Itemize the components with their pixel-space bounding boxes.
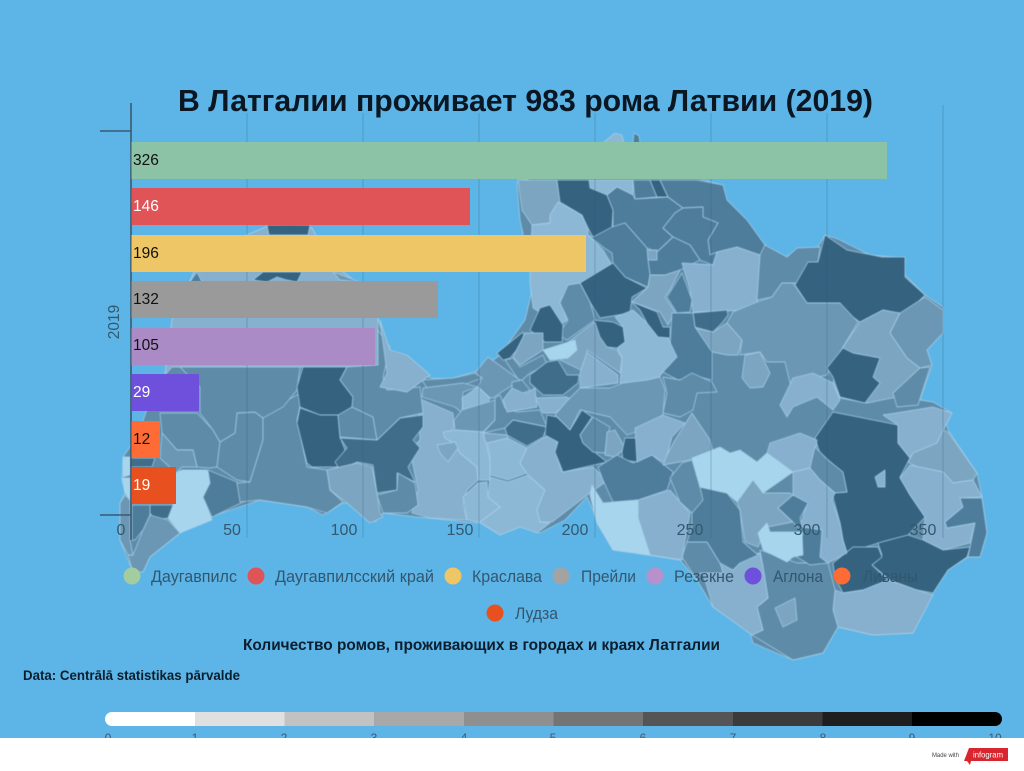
title: В Латгалии проживает 983 рома Латвии (2019)	[178, 83, 873, 118]
colour scale bar: 10	[988, 731, 1002, 745]
chart caption: Количество ромов, проживающих в городах и краях Латгалии	[243, 637, 720, 654]
colour scale bar: 0	[105, 731, 112, 745]
bar: Aglona 29: 29	[133, 384, 150, 401]
bar: Kraslava 196	[132, 235, 586, 272]
legend: Резекне	[674, 568, 734, 586]
legend: Прейли	[581, 568, 636, 586]
colour scale bar: 4	[461, 731, 468, 745]
colour scale bar: 1	[192, 731, 199, 745]
legend: Даугавпилс	[151, 568, 237, 586]
x axis labels: 200	[562, 522, 588, 539]
x axis labels: 50	[223, 522, 241, 539]
bar: Livani 12	[132, 421, 160, 458]
data source: Data: Centrālā statistikas pārvalde	[23, 668, 240, 683]
bar: Rezekne 105	[132, 328, 375, 365]
bar: Livani 12: 12	[133, 431, 150, 448]
legend: Аглона	[773, 568, 824, 586]
colour scale bar: 6	[640, 731, 647, 745]
made with infogram badge: infogram	[973, 750, 1003, 760]
bar: Aglona 29	[132, 374, 199, 411]
colour scale bar: 8	[820, 731, 827, 745]
legend: Лудза	[515, 605, 559, 623]
x axis labels: 300	[794, 522, 820, 539]
colour scale bar: 5	[550, 731, 557, 745]
bar: Kraslava 196: 196	[133, 245, 159, 262]
x axis labels: 250	[677, 522, 703, 539]
chart gridlines and vertical axis	[100, 103, 943, 540]
bar: Daugavpils 326	[132, 142, 887, 179]
bar chart: roma population 2019	[132, 142, 887, 504]
x axis labels	[117, 522, 936, 539]
made with infogram badge	[932, 748, 1008, 765]
x axis labels: 0	[117, 522, 126, 539]
x axis labels: 150	[447, 522, 473, 539]
bar: Daugavpils district 146: 146	[133, 198, 159, 215]
legend: Ливаны	[863, 568, 918, 586]
y axis label: 2019	[106, 305, 123, 339]
colour scale bar	[105, 712, 1002, 745]
made with infogram badge: Made with	[932, 752, 959, 759]
colour scale bar: 7	[730, 731, 737, 745]
x axis labels: 100	[331, 522, 357, 539]
legend: Краслава	[472, 568, 543, 586]
colour scale bar: 2	[281, 731, 288, 745]
map of Latvia by municipality	[120, 133, 987, 660]
legend: Даугавпилсский край	[275, 568, 434, 586]
colour scale bar: 3	[371, 731, 378, 745]
white footer strip	[0, 738, 1024, 771]
x axis labels: 350	[910, 522, 936, 539]
legend	[124, 568, 918, 623]
bar: Ludza 19	[132, 467, 176, 504]
bar: Preili 132: 132	[133, 291, 159, 308]
bar: Ludza 19: 19	[133, 477, 150, 494]
bar: Preili 132	[132, 281, 438, 318]
colour scale bar: 9	[909, 731, 916, 745]
bar: Rezekne 105: 105	[133, 337, 159, 354]
bar: Daugavpils 326: 326	[133, 152, 159, 169]
bar: Daugavpils district 146	[132, 188, 470, 225]
